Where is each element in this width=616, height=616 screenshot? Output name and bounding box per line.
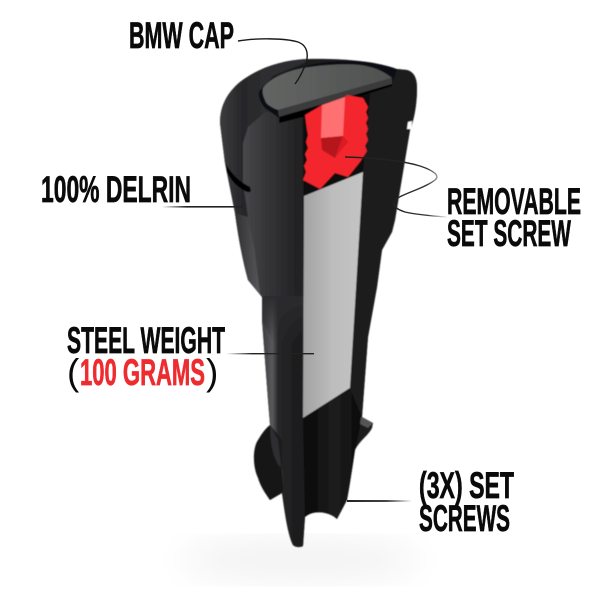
screw socket cone bbox=[321, 136, 343, 158]
floor shadow bbox=[180, 538, 420, 582]
leader line: set screws bbox=[347, 500, 412, 502]
stem blend shading bbox=[262, 296, 303, 345]
label: 100 grams: ( bbox=[67, 352, 79, 393]
right cut face bbox=[345, 69, 417, 417]
illustration: shift knob cutaway bbox=[220, 59, 417, 547]
red set screw bbox=[303, 95, 368, 189]
label: BMW cap: BMW CAP bbox=[129, 15, 234, 56]
leader line: delrin bbox=[162, 206, 243, 208]
label: 3x set: (3X) SET bbox=[419, 465, 514, 506]
cap recess rim bbox=[259, 61, 397, 118]
knob silhouette bbox=[220, 59, 417, 547]
black gap beneath cap bbox=[279, 84, 392, 123]
screw hex socket bbox=[321, 97, 345, 138]
bore cavity bbox=[303, 93, 370, 197]
left cut face bbox=[243, 111, 303, 297]
label: 100 grams: ) bbox=[206, 352, 218, 393]
leader line: BMW cap bbox=[238, 39, 307, 84]
BMW cap top face bbox=[263, 64, 392, 110]
label: screws: SCREWS bbox=[419, 498, 510, 539]
steel weight bbox=[303, 172, 363, 418]
stem cut face bbox=[262, 297, 305, 547]
lower bore bbox=[303, 388, 362, 519]
label: 100 grams: 100 GRAMS bbox=[80, 352, 205, 393]
groove right notch bbox=[407, 121, 412, 129]
leader line: steel weight bbox=[226, 353, 314, 354]
leader line: removable set screw bbox=[345, 157, 447, 217]
lower collar flange bbox=[255, 425, 283, 500]
lower lighter bulb edge bbox=[235, 213, 262, 297]
label: 100% Delrin: 100% DELRIN bbox=[41, 169, 191, 210]
cap edge bbox=[278, 78, 392, 117]
label: steel weight: STEEL WEIGHT bbox=[67, 320, 225, 361]
groove left notch bbox=[226, 164, 251, 192]
flange top surface bbox=[360, 417, 373, 428]
dome exterior bbox=[220, 59, 307, 297]
